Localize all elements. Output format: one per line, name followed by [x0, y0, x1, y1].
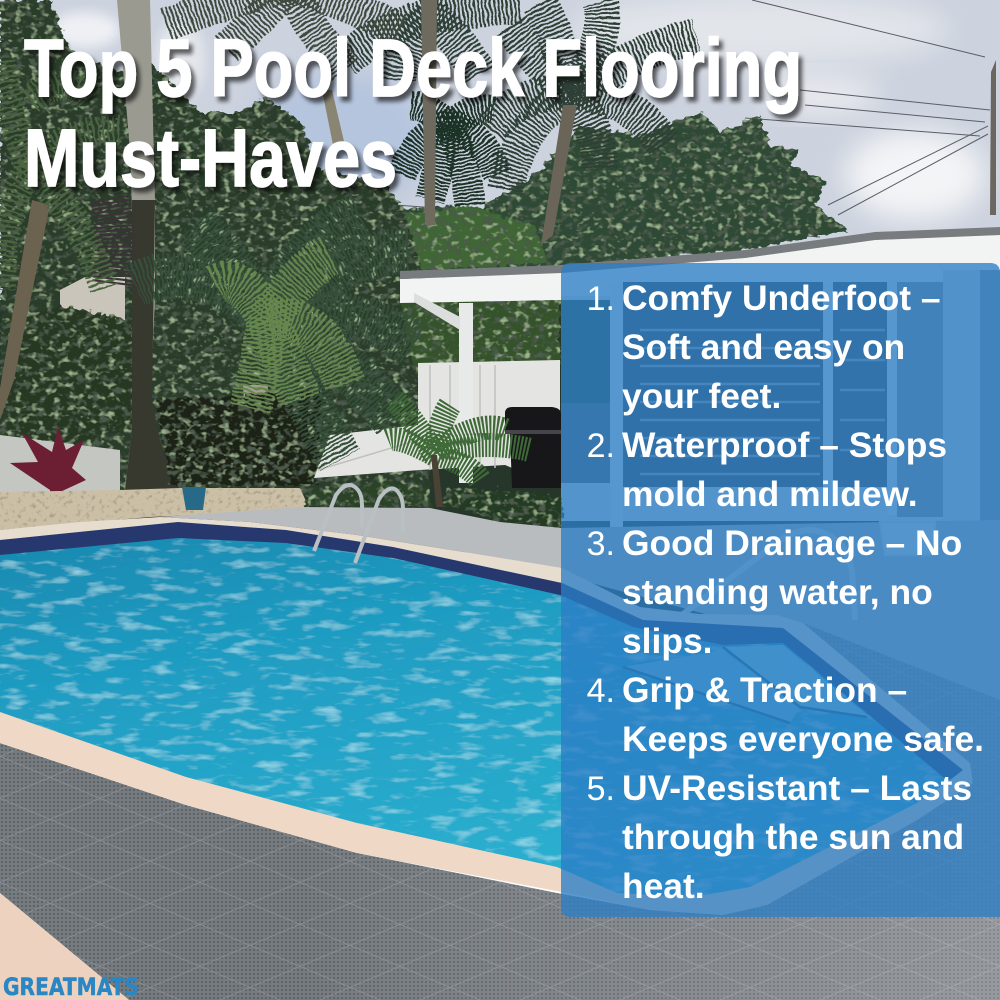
list item 4: Keeps everyone safe.	[622, 719, 984, 759]
gravel bed and blue bucket	[0, 487, 310, 530]
red ti plant	[10, 427, 86, 517]
list item 3: standing water, no	[622, 572, 933, 612]
concrete walkway	[160, 507, 1000, 780]
pool steps	[623, 645, 868, 723]
list item 2: Waterproof – Stops	[622, 425, 947, 465]
building: roof, posts, interior	[400, 227, 1000, 560]
list item 1	[587, 278, 941, 416]
title line 1: Top 5 Pool Deck Flooring	[24, 23, 802, 114]
list item 1: 1.	[587, 280, 615, 318]
list item 5: UV-Resistant – Lasts	[622, 768, 972, 808]
list item 1: your feet.	[622, 376, 781, 416]
list item 4	[587, 670, 984, 759]
list item 3	[587, 523, 962, 661]
list item 2: mold and mildew.	[622, 474, 918, 514]
small palm and shrubs	[303, 400, 562, 528]
bushes behind fence	[400, 300, 560, 375]
list item 4: 4.	[587, 672, 615, 710]
palm trunks	[0, 0, 268, 490]
list item 5: through the sun and	[622, 817, 964, 857]
far palms and trees behind the house	[345, 0, 848, 280]
utility pole and power lines	[370, 0, 996, 237]
grill	[505, 407, 561, 488]
title	[24, 23, 802, 204]
list item 4: Grip & Traction –	[622, 670, 907, 710]
pool water	[0, 538, 950, 897]
title line 2: Must-Haves	[24, 113, 397, 204]
grey mat deck	[0, 623, 1000, 1000]
panel background	[561, 263, 1000, 917]
list item 3: Good Drainage – No	[622, 523, 962, 563]
dark maroon frond	[110, 198, 115, 285]
list item 5: 5.	[587, 770, 615, 808]
list item 3: slips.	[622, 621, 712, 661]
base behind scene	[0, 250, 1000, 650]
list item 2: 2.	[587, 427, 615, 465]
pool coping	[0, 517, 973, 915]
list item 1: Soft and easy on	[622, 327, 905, 367]
white fence	[314, 360, 560, 488]
list item 1: Comfy Underfoot –	[622, 278, 941, 318]
sky	[0, 0, 1000, 300]
panel: must-have list	[561, 263, 1000, 917]
neighbouring house and wall	[0, 277, 125, 508]
dark shadow under palms	[155, 390, 320, 485]
central palm fronds	[0, 60, 415, 460]
list item 2	[587, 425, 947, 514]
peach tile corner	[0, 893, 129, 1000]
step stool and railing behind the pool	[670, 522, 935, 624]
mosaic tile band	[0, 522, 963, 780]
list item 3: 3.	[587, 525, 615, 563]
list item 5: heat.	[622, 866, 705, 906]
pool ladder rails	[314, 485, 403, 563]
left tree mass	[0, 0, 430, 500]
hedge on the left	[5, 305, 145, 445]
list item 5	[587, 768, 972, 906]
